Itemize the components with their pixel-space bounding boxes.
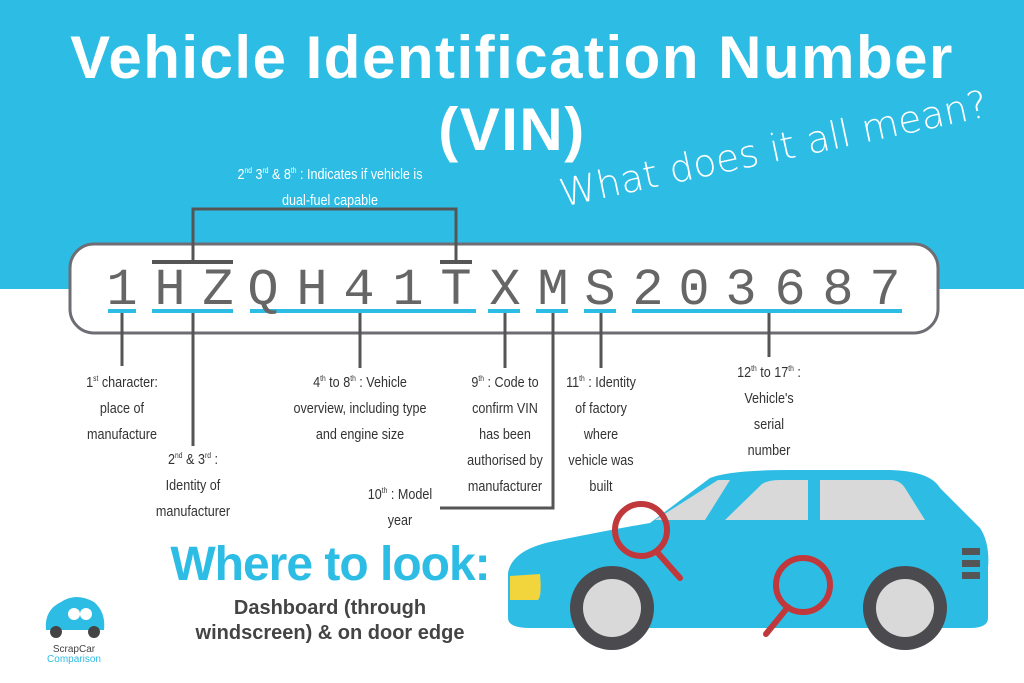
label 9th: confirm VIN	[472, 400, 538, 417]
vin characters: S	[584, 261, 616, 320]
vin characters: 4	[343, 261, 375, 320]
label 12-17: number	[748, 442, 790, 459]
label 11th: vehicle was	[568, 452, 634, 469]
where to look text: Dashboard (through	[234, 597, 426, 619]
label 1st: place of	[100, 400, 144, 417]
vin characters: M	[537, 261, 569, 320]
label 9th: has been	[479, 426, 531, 443]
vin characters: 8	[822, 261, 854, 320]
label 12-17: Vehicle's	[744, 390, 794, 407]
dual fuel note: dual-fuel capable	[282, 192, 378, 209]
label 1st: 1st character:	[86, 374, 158, 391]
vin characters: 7	[869, 261, 901, 320]
label 2nd 3rd: Identity of	[166, 477, 220, 494]
vin characters: H	[296, 261, 328, 320]
car illustration	[508, 470, 988, 650]
label 9th: manufacturer	[468, 478, 542, 495]
vin characters: 1	[392, 261, 424, 320]
label 12-17: 12th to 17th :	[737, 364, 801, 381]
logo: Comparison	[47, 654, 101, 665]
vin characters: X	[489, 261, 521, 320]
logo: ScrapCar	[53, 644, 95, 655]
vin box	[70, 244, 938, 333]
where to look text	[196, 597, 464, 644]
title: Vehicle Identification Number	[70, 24, 954, 91]
label 11th: 11th : Identity	[566, 374, 636, 391]
vin characters	[106, 261, 901, 320]
label 4-8: 4th to 8th : Vehicle	[313, 374, 407, 391]
where to look heading: Where to look:	[170, 538, 490, 591]
vin characters: 6	[774, 261, 806, 320]
label 1st: manufacture	[87, 426, 157, 443]
vin characters: Z	[202, 261, 234, 320]
label 4-8: overview, including type	[293, 400, 427, 417]
vin characters: H	[154, 261, 186, 320]
vin characters: 1	[106, 261, 138, 320]
subtitle handwritten: What does it all mean?	[555, 82, 992, 216]
vin characters: T	[440, 261, 472, 320]
vin characters: Q	[247, 261, 279, 320]
blue header band	[0, 0, 1024, 289]
label 12-17	[737, 364, 801, 459]
label 10th: 10th : Model	[368, 486, 432, 503]
dual fuel note: 2nd 3rd & 8th : Indicates if vehicle is	[237, 166, 423, 183]
label 9th	[467, 374, 543, 495]
label 4-8	[293, 374, 427, 443]
dual fuel note	[237, 166, 423, 209]
label 10th: year	[388, 512, 412, 529]
label 10th	[368, 486, 432, 529]
label 2nd 3rd: manufacturer	[156, 503, 230, 520]
title	[70, 24, 954, 163]
label 1st	[86, 374, 158, 443]
vin characters: 2	[632, 261, 664, 320]
title: (VIN)	[438, 96, 586, 163]
label 9th: authorised by	[467, 452, 543, 469]
label 2nd 3rd: 2nd & 3rd :	[168, 451, 218, 468]
where to look text: windscreen) & on door edge	[196, 622, 464, 644]
logo	[46, 597, 104, 665]
label 2nd 3rd	[156, 451, 230, 520]
vin characters: 0	[678, 261, 710, 320]
label 12-17: serial	[754, 416, 784, 433]
vin characters: 3	[725, 261, 757, 320]
label 9th: 9th : Code to	[471, 374, 539, 391]
label 11th: of factory	[575, 400, 627, 417]
label 11th: where	[584, 426, 618, 443]
label 11th	[566, 374, 636, 495]
label 4-8: and engine size	[316, 426, 404, 443]
label 11th: built	[589, 478, 613, 495]
